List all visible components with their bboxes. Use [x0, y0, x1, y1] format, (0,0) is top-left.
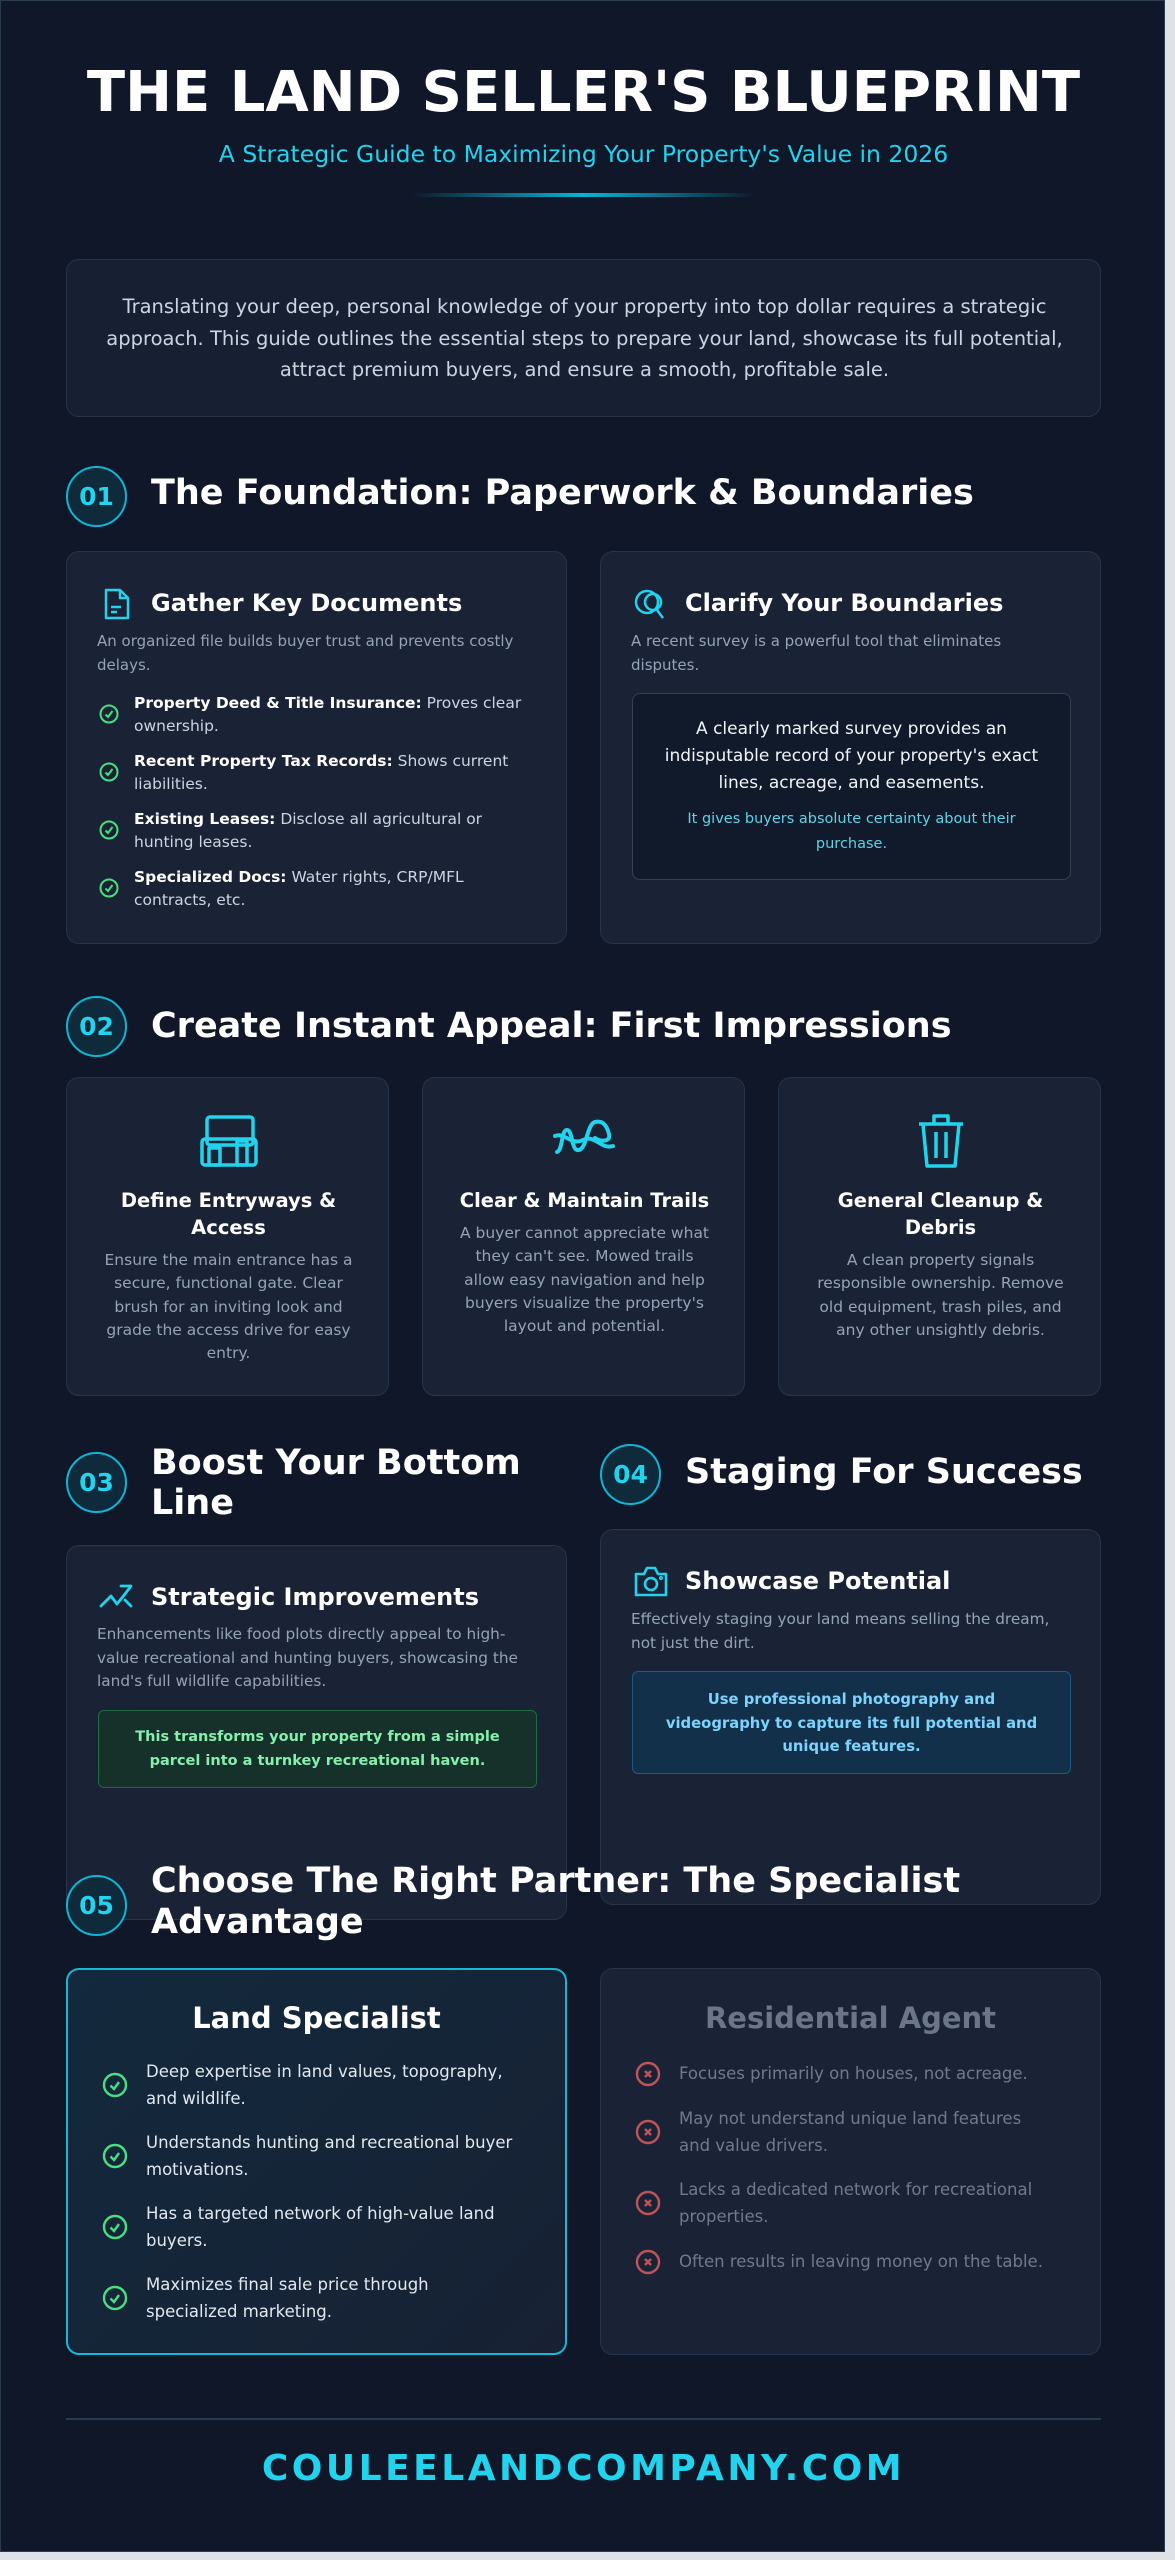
title: Clear & Maintain Trails: [460, 1189, 709, 1212]
text: A buyer cannot appreciate what they can't see. Mowed trails allow easy navigation and help buyers visualize the property's layout and potential.: [460, 1224, 709, 1335]
list: pros: Has a targeted network of high-value land buyers.: [146, 2204, 495, 2250]
panel: strategic improvements: [66, 1545, 567, 1920]
icon: document: [104, 588, 130, 620]
section 01 number: 01: [79, 482, 114, 511]
description: Enhancements like food plots directly appeal to high-value recreational and hunting buyers, showcasing the land's full wildlife capabilities.: [97, 1625, 518, 1690]
section 05 heading: Choose The Right Partner: The Specialist Advantage: [151, 1861, 960, 1942]
icon: gate: [200, 1115, 258, 1167]
icon: trail: [553, 1120, 616, 1154]
checklist: Existing Leases: Disclose all agricultural or hunting leases.: [134, 810, 482, 851]
section 02 heading: Create Instant Appeal: First Impressions: [151, 1006, 952, 1046]
panel: land specialist: [66, 1968, 567, 2355]
callout: blue: [632, 1671, 1071, 1774]
list: pros: [102, 2062, 512, 2321]
description: Effectively staging your land means selling the dream, not just the dirt.: [631, 1610, 1049, 1652]
panel: entryways: [66, 1077, 389, 1396]
intro box: Translating your deep, personal knowledge of your property into top dollar requires a strategic approach. This guide outlines the essential steps to prepare your land, showcase its full potential, attract premium buyers, and ensure a smooth, profitable sale.: [106, 295, 1063, 381]
section 05 number: [66, 1875, 127, 1936]
panel: trails: [422, 1077, 745, 1396]
list: cons: Lacks a dedicated network for recreational properties.: [679, 2180, 1032, 2226]
heading: Strategic Improvements: [151, 1583, 479, 1611]
subtitle: A Strategic Guide to Maximizing Your Property's Value in 2026: [219, 140, 948, 168]
icon: search: [634, 590, 664, 619]
panel: residential agent: [600, 1968, 1101, 2355]
description: An organized file builds buyer trust and prevents costly delays.: [97, 632, 513, 674]
title: General Cleanup & Debris: [838, 1189, 1043, 1239]
section 04 number: 04: [613, 1460, 648, 1489]
section 03 number: 03: [79, 1468, 114, 1497]
callout: survey: It gives buyers absolute certainty about their purchase.: [687, 811, 1016, 852]
list: cons: [636, 2062, 1043, 2274]
heading: Land Specialist: [192, 2001, 441, 2035]
list: cons: May not understand unique land features and value drivers.: [679, 2109, 1021, 2155]
title: Define Entryways & Access: [121, 1189, 336, 1239]
section 04 number: [600, 1444, 661, 1505]
callout: survey: [632, 693, 1071, 880]
heading: Gather Key Documents: [151, 589, 462, 617]
text: A clean property signals responsible ownership. Remove old equipment, trash piles, and any other unsightly debris.: [817, 1251, 1064, 1339]
callout: green: This transforms your property from a simple parcel into a turnkey recreational haven.: [135, 1729, 500, 1769]
section 04 heading: Staging For Success: [685, 1452, 1083, 1492]
section 02 number: [66, 996, 127, 1057]
checklist: Recent Property Tax Records: Shows current liabilities.: [134, 752, 508, 793]
heading: Clarify Your Boundaries: [685, 589, 1003, 617]
panel: cleanup: [778, 1077, 1101, 1396]
section 03 number: [66, 1452, 127, 1513]
section 01 heading: The Foundation: Paperwork & Boundaries: [151, 473, 974, 513]
text: Ensure the main entrance has a secure, functional gate. Clear brush for an inviting look and grade the access drive for easy entry.: [104, 1251, 352, 1362]
list: cons: Focuses primarily on houses, not acreage.: [679, 2064, 1028, 2083]
callout: green: [98, 1710, 537, 1788]
checklist: Property Deed & Title Insurance: Proves clear ownership.: [134, 694, 521, 735]
icon: trend: [100, 1584, 132, 1608]
list: pros: Understands hunting and recreational buyer motivations.: [146, 2133, 512, 2179]
description: A recent survey is a powerful tool that eliminates disputes.: [631, 632, 1001, 674]
panel: showcase potential: [600, 1529, 1101, 1905]
checklist: [100, 694, 522, 909]
panel: gather key documents: [66, 551, 567, 944]
section 05 number: 05: [79, 1891, 114, 1920]
section 01 number: [66, 466, 127, 527]
title: THE LAND SELLER'S BLUEPRINT: [87, 60, 1080, 125]
footer url: COULEELANDCOMPANY.COM: [262, 2448, 905, 2489]
heading: Residential Agent: [705, 2001, 996, 2035]
callout: survey: A clearly marked survey provides an indisputable record of your property's exact lines, acreage, and easements.: [665, 719, 1038, 793]
intro box: [66, 259, 1101, 417]
list: cons: Often results in leaving money on the table.: [679, 2252, 1043, 2271]
icon: trash: [919, 1114, 963, 1168]
section 02 number: 02: [79, 1012, 114, 1041]
list: pros: Maximizes final sale price through specialized marketing.: [146, 2275, 429, 2321]
section 03 heading: Boost Your Bottom Line: [151, 1443, 521, 1523]
panel: clarify boundaries: [600, 551, 1101, 944]
icon: camera: [634, 1566, 668, 1596]
accent line: [411, 193, 756, 197]
heading: Showcase Potential: [685, 1567, 950, 1595]
list: pros: Deep expertise in land values, topography, and wildlife.: [146, 2062, 503, 2108]
checklist: Specialized Docs: Water rights, CRP/MFL contracts, etc.: [134, 868, 464, 909]
callout: blue: Use professional photography and videography to capture its full potential and unique features.: [666, 1691, 1037, 1755]
